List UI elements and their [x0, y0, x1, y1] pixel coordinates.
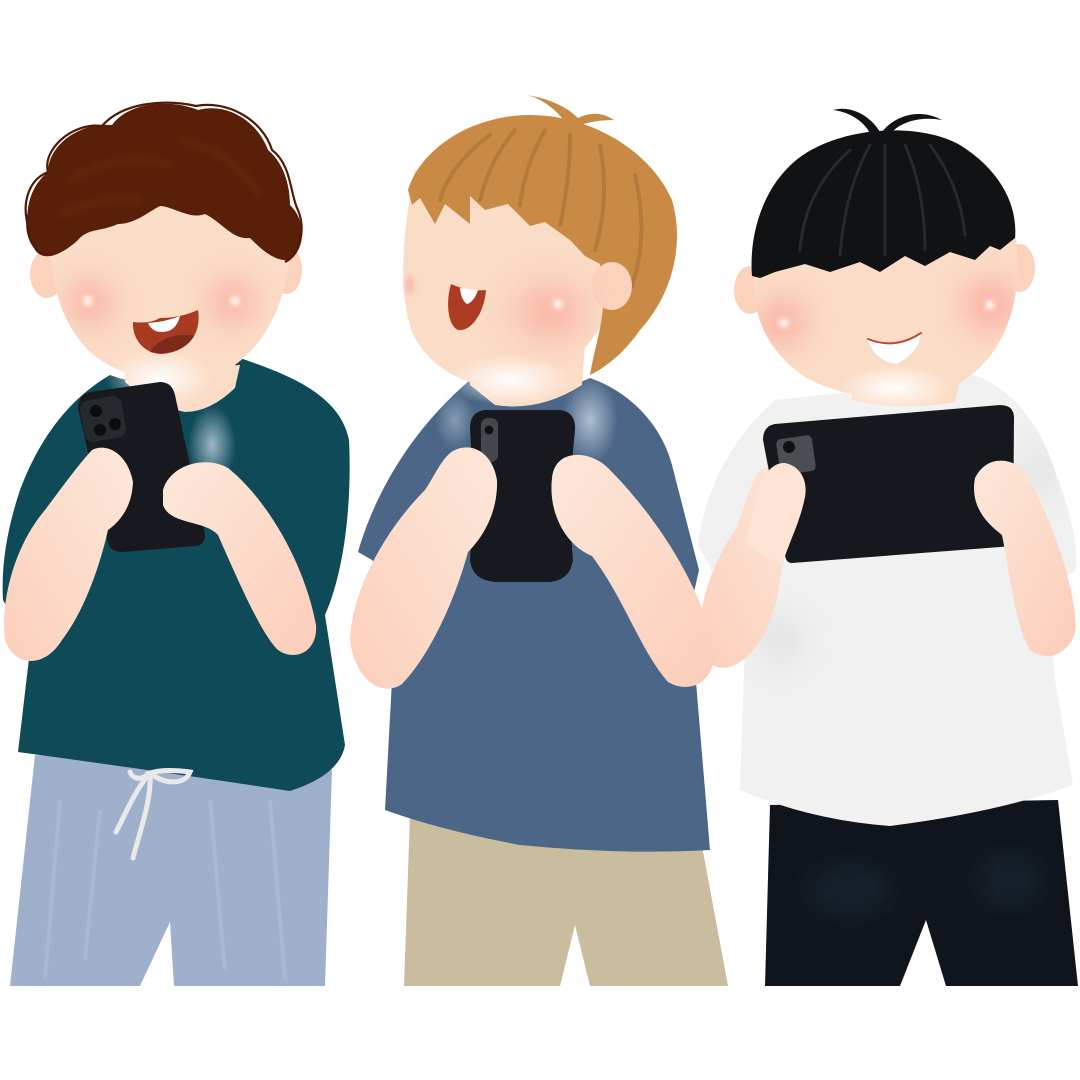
boy 1 trousers [10, 755, 332, 986]
boy 2 right arm [551, 455, 714, 687]
boy 2 mouth [448, 284, 486, 330]
boy 1 hair [27, 104, 302, 260]
boy 1 shirt [3, 358, 350, 791]
boy 3 face [754, 225, 1018, 398]
boy 1 ears [30, 246, 302, 298]
boy 1 hair curls [26, 103, 302, 262]
boy 1 screen glow [105, 350, 215, 406]
boy 3 cheek highlights [780, 300, 994, 328]
boy 2 phone camera [481, 418, 498, 462]
boy 2 shoulder glow [562, 376, 618, 464]
boy 3 hair strands [800, 145, 965, 255]
boy 3 mouth lines [868, 333, 921, 343]
boy 3 ears [734, 244, 1035, 314]
boy 3 neck [850, 380, 960, 407]
boy 2 shirt [358, 378, 710, 852]
boy 2 hair strands [440, 130, 641, 290]
boy 2 cheeks [516, 288, 584, 336]
boy 3 left arm [700, 465, 806, 668]
boy 2 hair tuft [527, 95, 614, 125]
boy 2 phone [470, 410, 575, 582]
boy 3 trouser mottling [812, 854, 1040, 915]
boy 1 teeth [148, 316, 180, 332]
boy 1 tongue [150, 335, 194, 353]
boy 3 shirt [698, 372, 1076, 826]
boy 3 left hand [745, 463, 806, 565]
boy 2 left ear hint [406, 276, 414, 294]
boy 3: black hair, white shirt [698, 109, 1078, 986]
boy 2 hair [408, 115, 677, 375]
boy 1 cheeks [68, 280, 254, 325]
boy 1 phone cameras [79, 395, 127, 443]
boy 3 trousers [765, 800, 1078, 986]
boy 2 shoulder glow left [435, 390, 475, 450]
boy 1 phone [78, 382, 205, 552]
boy 1 phone glow [188, 405, 236, 485]
boy 2 left arm [350, 447, 497, 689]
boy 1 right arm [163, 462, 316, 655]
boy 1: curly brown hair, teal shirt [3, 103, 350, 986]
boy 3 phone [763, 405, 1014, 563]
boy 2 neck [470, 345, 585, 406]
boy 2: ginger hair, blue shirt [350, 95, 728, 986]
boy 3 mouth [867, 333, 921, 364]
boy 3 hair [752, 130, 1015, 278]
boy 1 face [49, 200, 291, 382]
boy 3 right arm [974, 461, 1076, 656]
boy 1 drawstring [116, 771, 190, 858]
boy 3 screen glow [837, 364, 953, 412]
boy 1 left arm [4, 448, 133, 661]
boy 2 ear [592, 262, 632, 310]
boy 1 hair texture [60, 140, 260, 215]
boy 1 neck [125, 365, 240, 412]
boy 1 trouser folds [45, 800, 285, 980]
boy 2 cheek highlight [554, 300, 562, 308]
boy 2 face [403, 170, 620, 387]
boy 2 trousers [404, 815, 728, 986]
boy 2 screen glow [448, 354, 572, 406]
boy 1 mouth [133, 310, 199, 354]
boy 1 cheek highlights [84, 296, 240, 306]
boy 3 phone camera [776, 435, 816, 475]
boy 2 teeth [460, 288, 478, 304]
boy 3 shirt shading [765, 456, 1051, 658]
boy 3 hair tuft [833, 109, 942, 134]
boy 3 cheeks [758, 279, 1016, 346]
